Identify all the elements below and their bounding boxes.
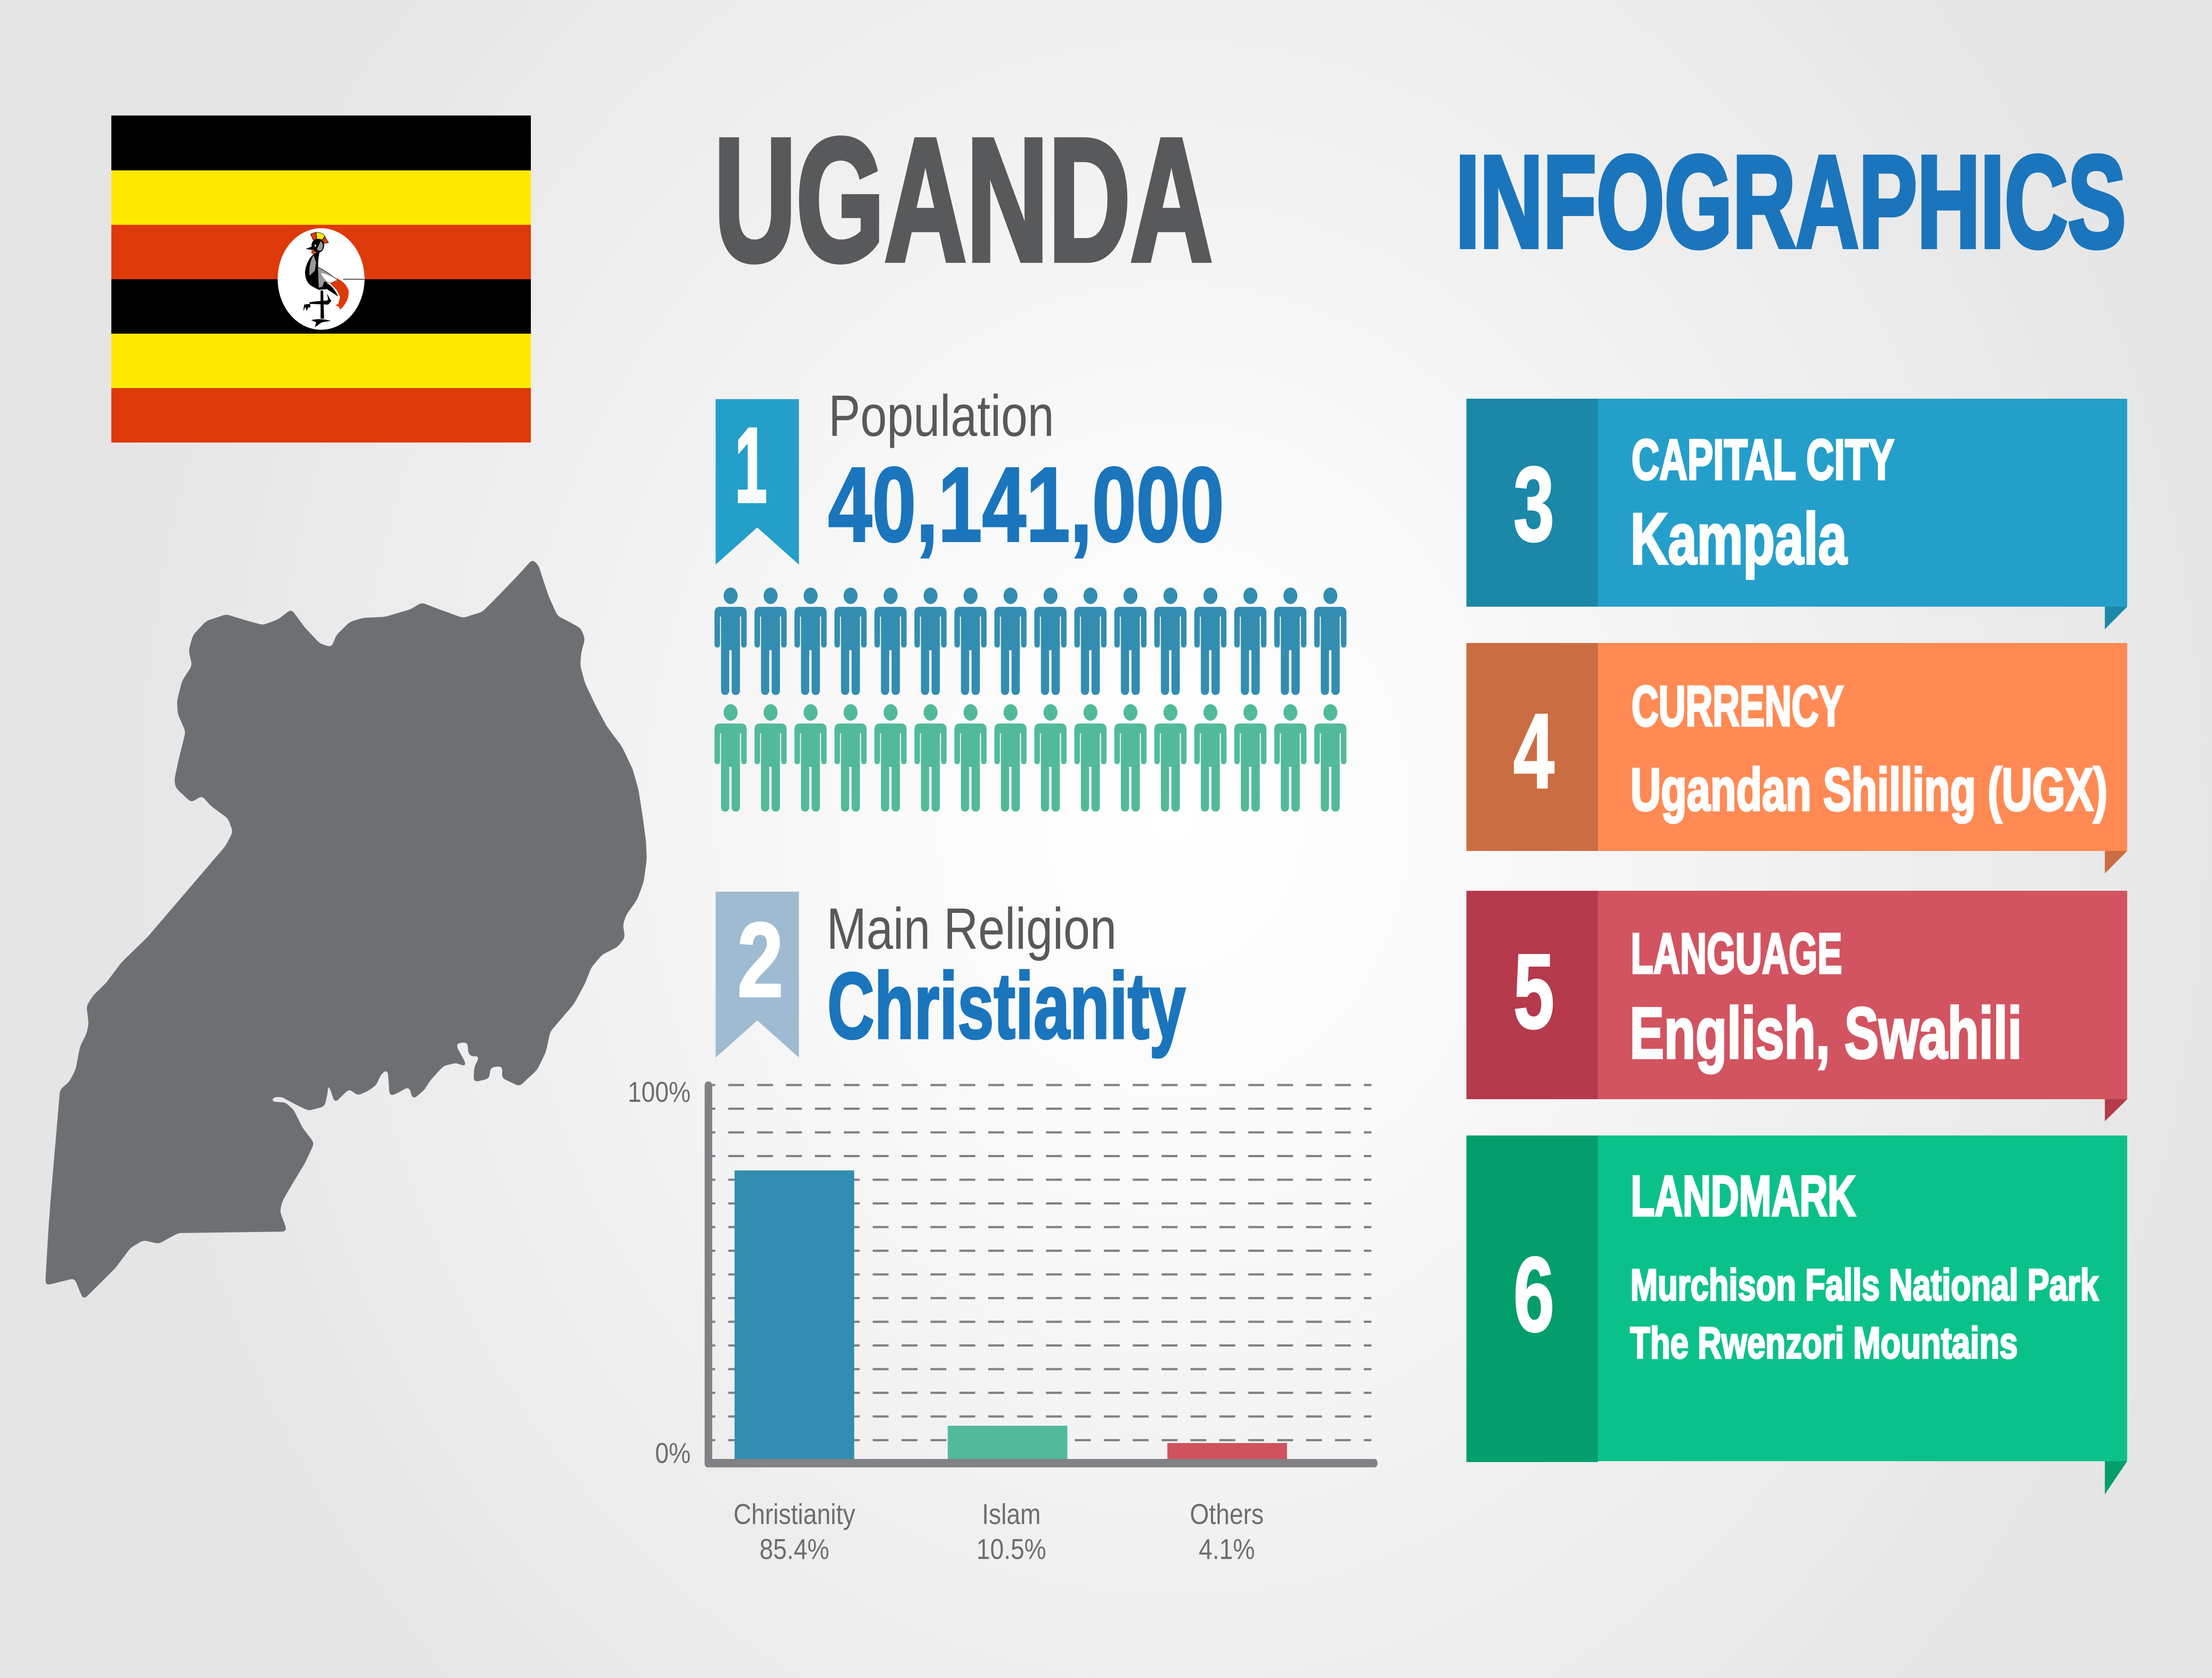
category label: Christianity: 85.4%	[760, 1533, 829, 1565]
bar: Islam	[948, 1426, 1068, 1459]
label: Population: Population	[829, 384, 1054, 449]
ribbon badge 1	[716, 399, 799, 565]
axis label 100%: 100%	[628, 1076, 691, 1108]
number 3: 3	[1513, 445, 1554, 564]
panel: capital city	[1467, 399, 2127, 629]
value: 40,141,000: 40,141,000	[828, 446, 1224, 564]
value: Murchison Falls National Park: Murchison Falls National Park	[1630, 1260, 2098, 1309]
panel: main religion	[716, 892, 1186, 1058]
panel: landmark	[1467, 1135, 2127, 1494]
map of Uganda	[46, 560, 646, 1299]
value: Ugandan Shilling (UGX): Ugandan Shilling (UGX)	[1630, 755, 2108, 823]
ribbon badge 2: 2	[737, 901, 783, 1020]
heading: CURRENCY: CURRENCY	[1632, 674, 1843, 738]
title: UGANDA: UGANDA	[714, 102, 1212, 297]
category label: Others: Others	[1190, 1498, 1263, 1530]
panel: population	[714, 384, 1346, 812]
number 4: 4	[1513, 692, 1554, 811]
category label: Islam: 10.5%	[976, 1533, 1046, 1565]
ribbon badge 1: 1	[735, 406, 767, 525]
category label: Others: 4.1%	[1199, 1533, 1255, 1565]
value: English, Swahili: English, Swahili	[1630, 993, 2022, 1074]
panel: currency	[1467, 643, 2127, 874]
category label: Christianity: Christianity	[733, 1498, 855, 1530]
bar: Christianity	[734, 1170, 854, 1459]
flag of Uganda	[111, 115, 531, 443]
bar: Others	[1167, 1443, 1287, 1459]
bar chart: religion share	[628, 1076, 1378, 1565]
axis label 0%: 0%	[655, 1437, 691, 1469]
icon: crested crane	[303, 232, 349, 327]
value: Kampala: Kampala	[1630, 499, 1847, 579]
heading: CAPITAL CITY: CAPITAL CITY	[1632, 428, 1894, 492]
ribbon badge 2	[716, 892, 799, 1058]
icon row: green people	[714, 704, 1346, 812]
label: Main Religion: Main Religion	[826, 897, 1117, 962]
heading: LANGUAGE: LANGUAGE	[1631, 922, 1842, 985]
icon row: blue people	[714, 588, 1346, 695]
heading: LANDMARK: LANDMARK	[1631, 1164, 1856, 1228]
number 6: 6	[1513, 1235, 1554, 1354]
panel: language	[1467, 891, 2127, 1121]
value: The Rwenzori Mountains: The Rwenzori Mountains	[1630, 1318, 2018, 1367]
category label: Islam: Islam	[982, 1498, 1041, 1530]
value: Christianity: Christianity	[827, 953, 1186, 1058]
number 5: 5	[1513, 932, 1554, 1051]
